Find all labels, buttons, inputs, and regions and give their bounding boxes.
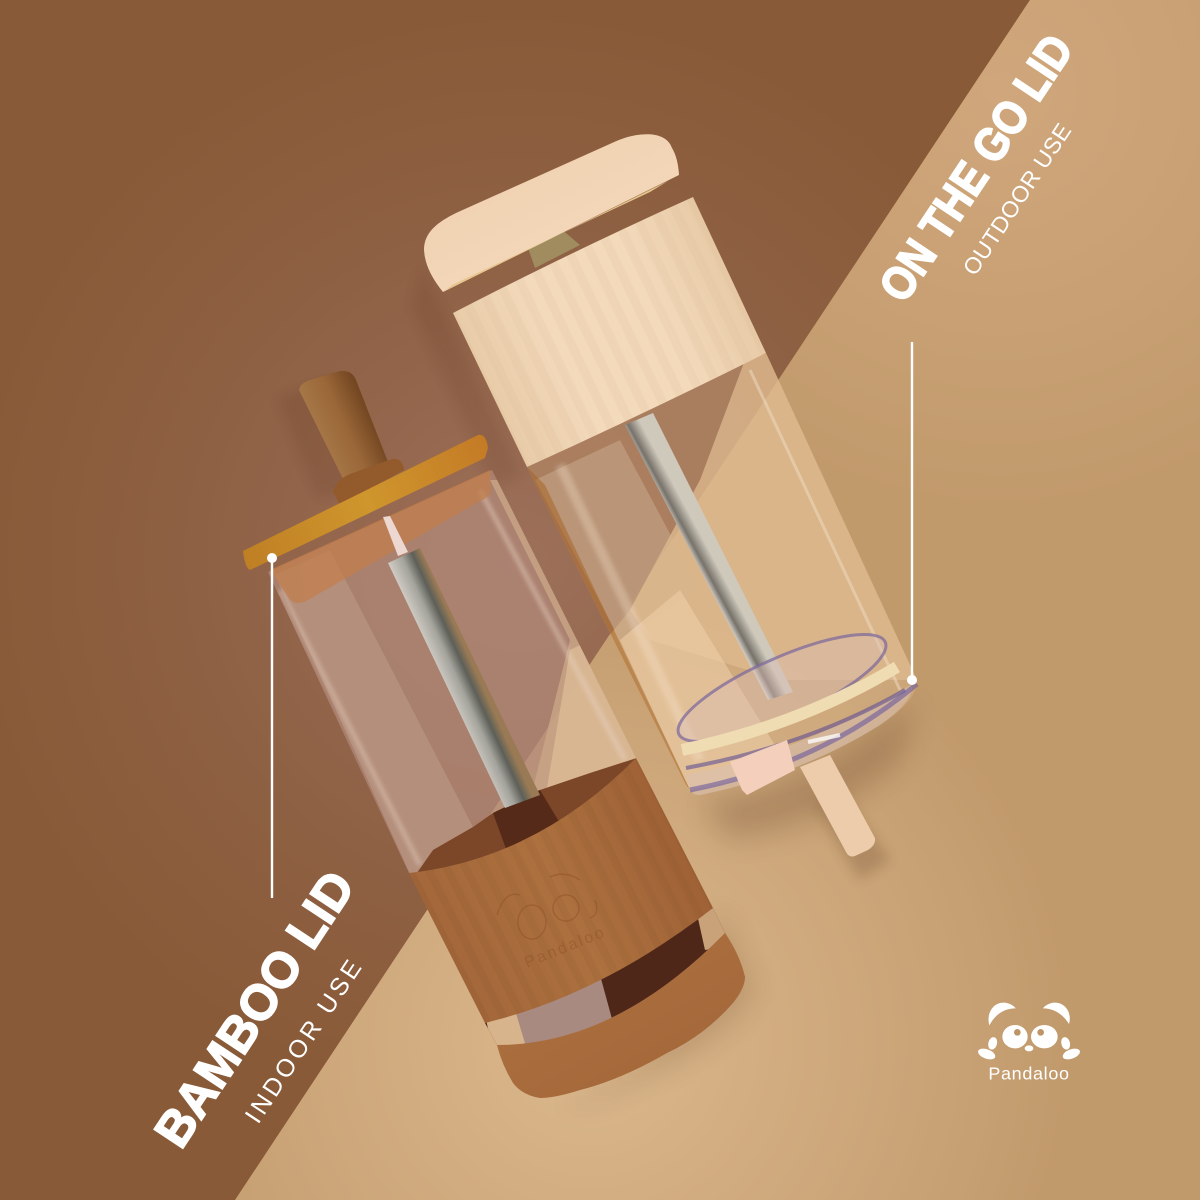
callout line: bamboo lid (267, 553, 277, 898)
left bottle: bamboo lid (243, 371, 750, 1098)
brown ribbed sleeve (409, 758, 713, 1023)
logo: Pandaloo (977, 1003, 1081, 1083)
bamboo lid board (243, 435, 488, 570)
panda eyes (1002, 1025, 1058, 1048)
heading: bamboo lid: BAMBOO LID (143, 861, 366, 1157)
subheading: outdoor use: OUTDOOR USE (957, 119, 1076, 280)
brand name: Pandaloo (988, 1063, 1069, 1083)
straw highlight at lid (383, 516, 408, 556)
subheading: indoor use: INDOOR USE (240, 955, 367, 1128)
brown base cap (497, 933, 745, 1098)
left bottle metal straw (388, 548, 540, 808)
right bottle cream lid (424, 134, 679, 292)
bottle shadows (278, 266, 915, 1110)
panda ears (989, 1003, 1070, 1025)
embossed panda logo on sleeve (497, 874, 597, 939)
silicone stopper straw (299, 371, 388, 483)
panda paws (977, 1036, 1081, 1061)
stopper washer (333, 459, 404, 505)
right bottle metal straw (625, 413, 793, 700)
panda nose (1025, 1045, 1033, 1051)
right bottle pink plug (730, 740, 795, 795)
right bottle clear base rings (667, 615, 917, 795)
right bottle glass body (527, 353, 917, 790)
right bottle straw tip (800, 755, 875, 856)
embossed brand on sleeve: Pandaloo (522, 924, 606, 972)
callout line: on the go lid (907, 342, 917, 685)
right bottle: on the go lid (424, 134, 940, 856)
left bottle glass gap above base (485, 908, 745, 1045)
left bottle lid insert (270, 470, 491, 603)
right bottle inner straw at the gap (528, 228, 580, 268)
right bottle cream sleeve (453, 197, 766, 467)
left bottle glass body (268, 470, 636, 873)
